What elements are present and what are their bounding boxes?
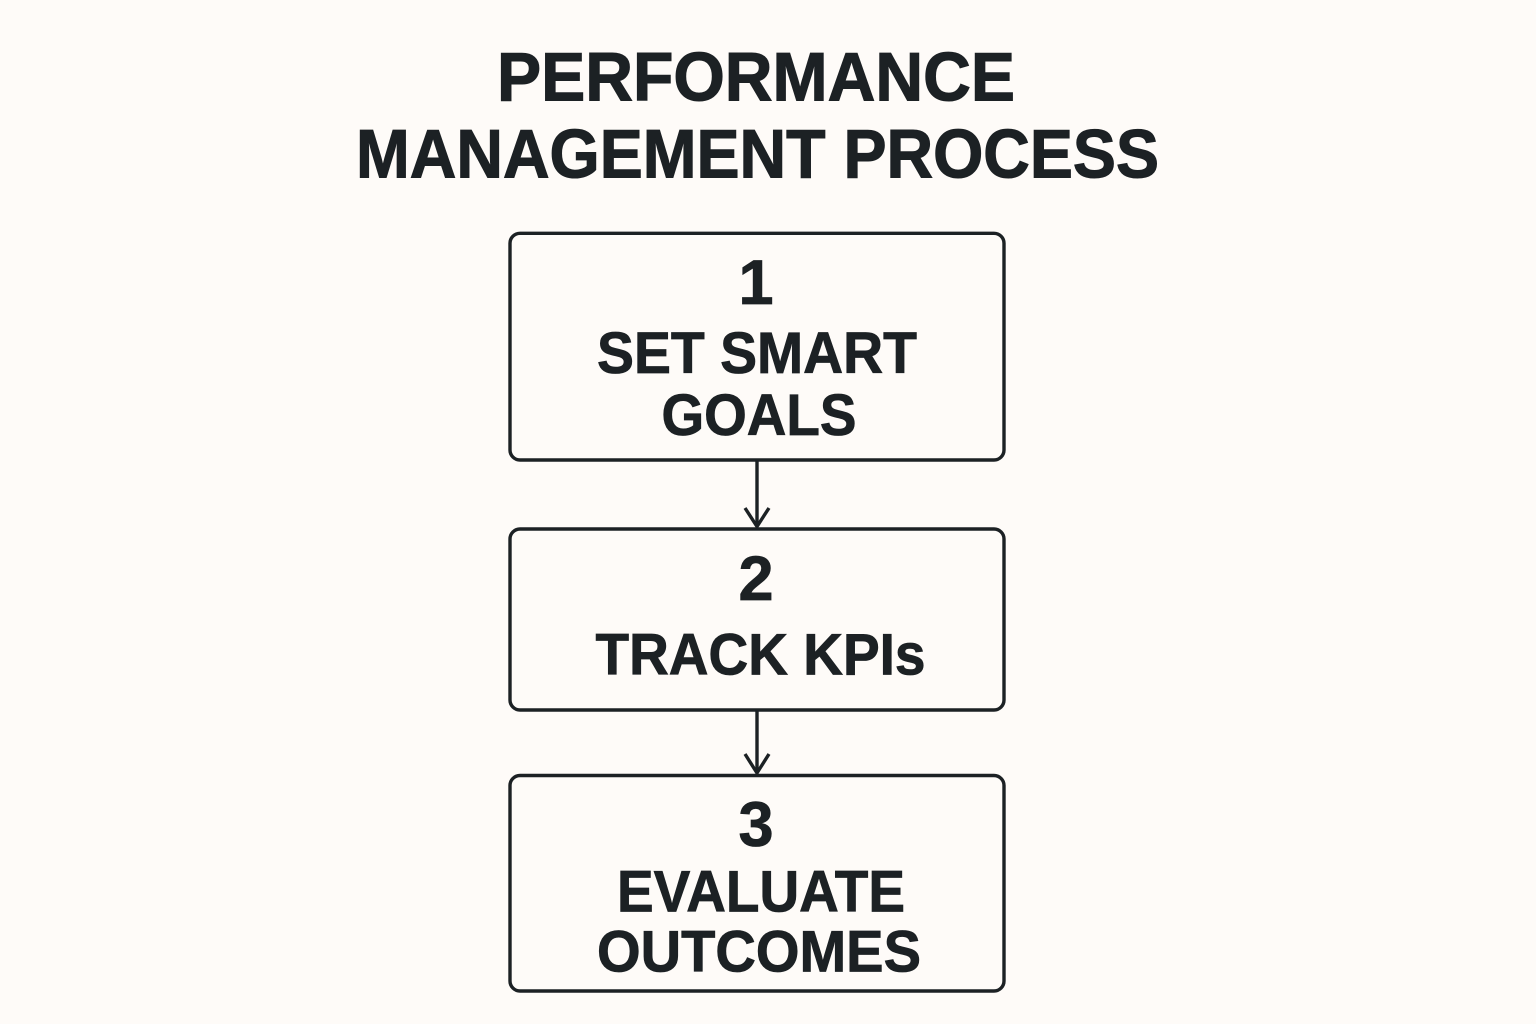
panel: step 2 track KPIs: 2	[738, 544, 774, 614]
title: PERFORMANCE	[497, 38, 1015, 116]
panel: step 3 evaluate outcomes: EVALUATE	[617, 860, 905, 924]
panel: step 3 evaluate outcomes: OUTCOMES	[597, 920, 921, 984]
title	[356, 38, 1159, 192]
panel: step 1 set smart goals: SET SMART	[597, 321, 917, 386]
arrow: step 1 to step 2	[745, 460, 769, 526]
panel: step 1 set smart goals	[510, 233, 1004, 460]
panel: step 2 track KPIs	[510, 529, 1004, 710]
arrow: step 2 to step 3	[745, 710, 769, 773]
panel: step 3 evaluate outcomes: 3	[738, 790, 774, 860]
panel: step 3 evaluate outcomes	[510, 776, 1004, 991]
title: MANAGEMENT PROCESS	[356, 116, 1159, 192]
panel: step 1 set smart goals: GOALS	[662, 383, 856, 448]
panel: step 1 set smart goals: 1	[738, 248, 774, 318]
panel: step 2 track KPIs: TRACK KPIs	[596, 622, 926, 688]
